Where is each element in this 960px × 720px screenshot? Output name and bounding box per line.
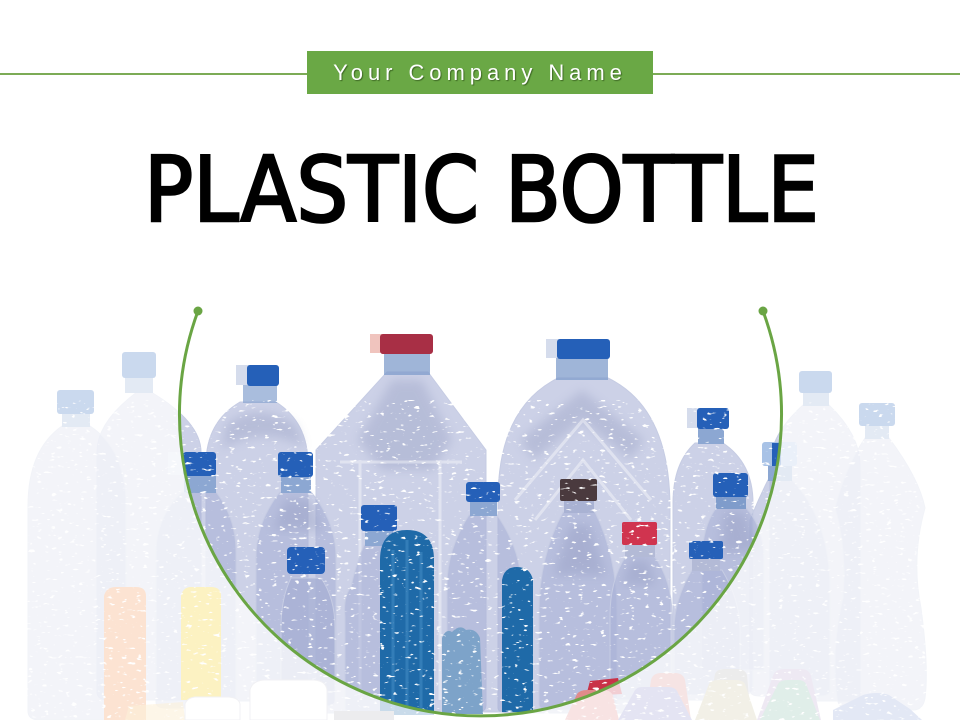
tall bottle far right: [770, 371, 860, 701]
bottle texture: [0, 400, 960, 720]
company name banner: [307, 51, 653, 94]
big bottle with red cap: [316, 334, 486, 713]
bottle front-left blue cap: [281, 547, 335, 706]
title: PLASTIC BOTTLE: [144, 138, 819, 243]
coloured containers, left: [104, 587, 221, 720]
bottle right with blue cap: [673, 408, 753, 694]
bottle with blue cap, left of arc: [156, 452, 236, 708]
company name banner: Your Company Name: [333, 60, 627, 85]
bottle front blue cap low right: [674, 541, 740, 700]
bottle with blue cap behind arc right: [750, 442, 830, 696]
white caps, bottom left: [185, 680, 394, 720]
big bottle with blue cap: [498, 339, 670, 713]
header line right: [653, 73, 960, 75]
waisted bottle right: [835, 403, 926, 710]
coloured containers, bottom right: [565, 669, 922, 720]
small bottle with blue cap: [345, 505, 401, 712]
bottle front right blue cap: [702, 473, 764, 670]
tall bottle left: [97, 352, 201, 700]
bottle with dark brown cap: [539, 479, 617, 710]
tall bottle far left: [28, 390, 126, 720]
bottle with red cap: [610, 522, 672, 700]
blue preform tubes: [380, 530, 533, 715]
header line left: [0, 73, 307, 75]
bottle with blue cap, upper left: [206, 365, 308, 701]
green arc with end dots: [179, 306, 781, 716]
small bottle centre-left: [256, 452, 336, 691]
bottle with blue cap, centre: [447, 482, 521, 712]
